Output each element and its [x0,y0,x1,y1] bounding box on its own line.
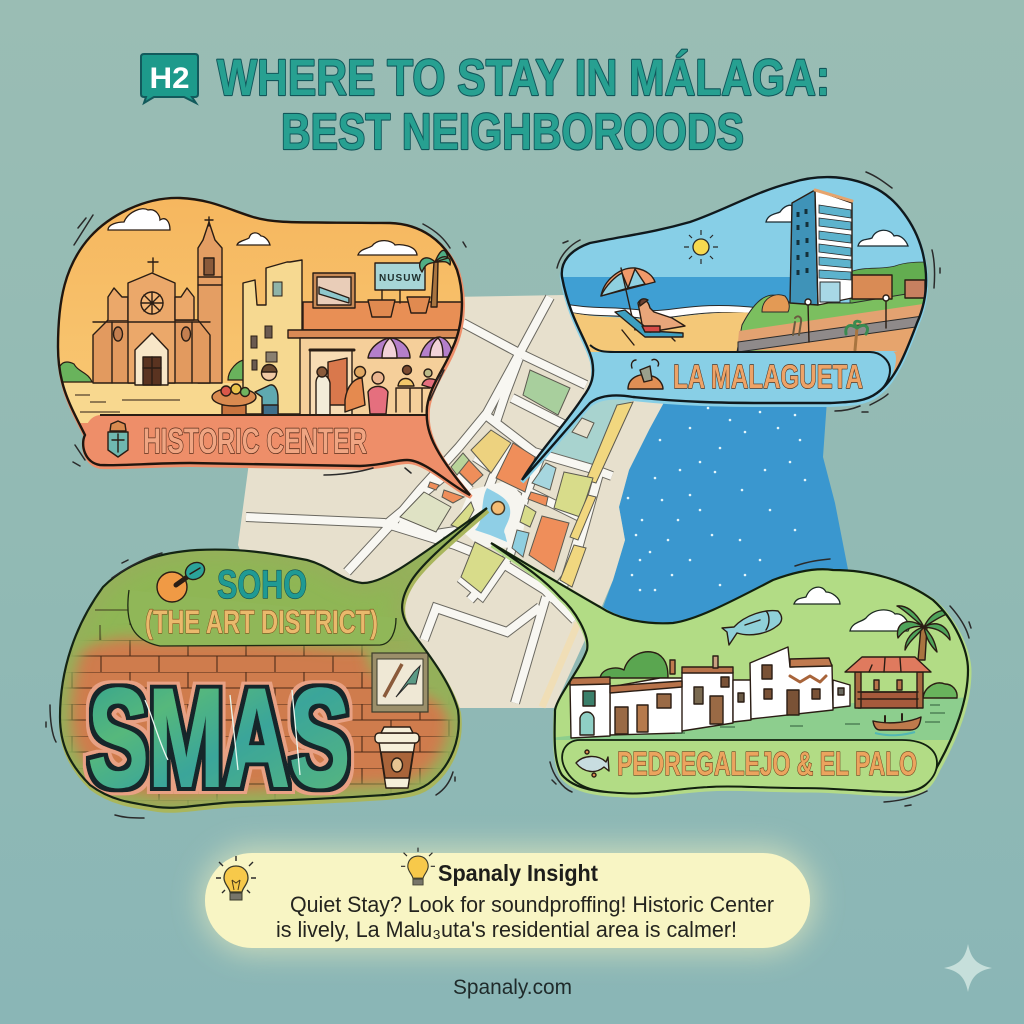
icon: shell and crab [628,359,663,389]
clouds [766,205,908,246]
panel: La Malagueta bubble [522,175,930,482]
right bush [923,683,957,698]
market stall with fruit and vendor [212,364,278,420]
streets [246,297,612,707]
panel: Pedregalejo bubble [480,540,980,800]
label panel outline [562,740,937,793]
lamp posts and palm [793,295,889,350]
label panel: Soho [128,590,396,646]
clouds [794,587,909,631]
hillside and promenade [736,294,923,351]
callout text: is lively, La Malu₃uta's residential area is calmer! [276,917,737,942]
ruin tower [243,260,302,414]
banner: Historic Center [83,415,470,495]
panel: historic center bubble [50,190,471,497]
pots [368,297,430,317]
palm [420,250,450,307]
icon: coffee cup [375,727,419,788]
callout text [276,892,774,942]
footer: site name: Spanaly.com [453,976,572,999]
callout heading: Spanaly Insight [438,860,598,886]
scene: brick wall [61,522,469,806]
trees behind village [600,652,668,678]
icon: sun [684,230,718,264]
museum sign [375,263,425,303]
map pin [475,488,510,542]
scene: church and plaza [50,190,470,423]
terrace and rooftop [303,302,465,330]
high-rise tower [790,190,852,305]
panel: Soho bubble [30,508,490,816]
motion lines: historic center [73,215,466,475]
callout text: Quiet Stay? Look for soundproffing! Historic Center [290,892,774,917]
icon: H2 speech badge [141,54,198,103]
motion lines: La Malagueta [557,172,940,412]
icon: beach umbrella and lounger [601,268,685,345]
motion lines: Pedregalejo [550,559,971,806]
beach hut [845,657,931,708]
callout: insight box [200,846,816,954]
icon: artist palette [157,559,208,602]
icon: H2 speech badge: H2 [150,62,190,95]
map base land [238,295,668,708]
buildings in town [852,275,925,299]
teal harbour area [546,380,640,468]
umbrellas [368,337,453,358]
doors and windows [615,707,628,734]
rowing boat [873,714,921,730]
label: La Malagueta: LA MALAGUETA [673,358,863,395]
graffiti details [145,690,300,775]
framed picture [313,273,355,308]
church [93,217,222,385]
label: The Art District: (THE ART DISTRICT) [145,604,378,640]
whitewashed houses [570,647,850,738]
label: Soho: SOHO [217,563,307,607]
callout body [205,853,810,948]
graffiti tag: SMAS [88,659,350,816]
heading line 2: BEST NEIGHBOROODS [281,103,744,160]
sea [602,395,852,640]
icon: city crest [108,421,128,457]
trees behind town [850,262,930,303]
scene: fishing village [556,586,964,740]
title block [141,49,830,160]
district blocks [400,370,633,593]
map [238,295,668,708]
icon: large light bulb [216,856,256,900]
icon: fish and shells [576,750,609,777]
palm tree [897,606,952,660]
doorway and people [310,350,436,416]
museum sign: NUSUW [379,273,422,284]
icon: fish in sky [722,611,782,645]
icon: bushes [60,362,92,382]
callout glow [200,846,816,954]
framed brush art [372,653,428,712]
scene: beach and high-rise [563,188,925,375]
label: Historic Center: HISTORIC CENTER [143,422,367,461]
heading line 1: WHERE TO STAY IN MÁLAGA: [217,49,830,106]
motion lines: Soho [46,553,455,818]
icon: sparkle [944,944,992,992]
clouds [108,209,417,255]
icon: small light bulb [401,848,435,885]
